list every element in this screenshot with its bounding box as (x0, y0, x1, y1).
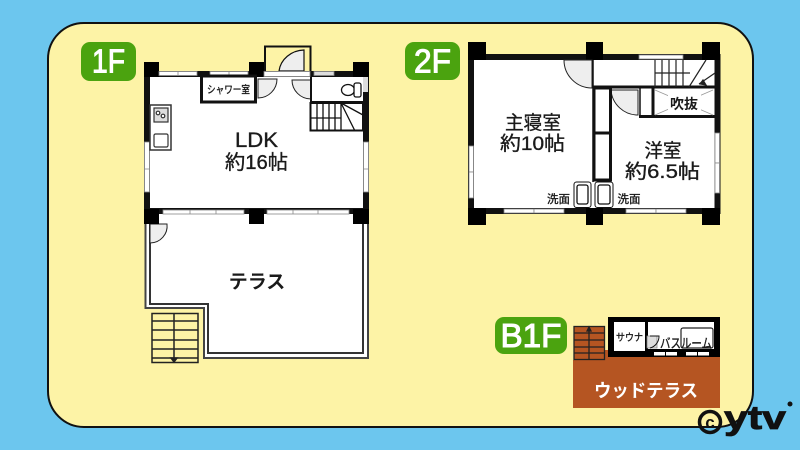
floor plan: 1F (144, 46, 369, 362)
brick stairs (574, 326, 604, 360)
western room label: 洋室 (644, 140, 682, 162)
washbasins (574, 182, 613, 208)
entrance (265, 46, 310, 72)
logo: ytv: c (705, 413, 715, 432)
shower room (202, 76, 256, 102)
bathroom: バスルーム (660, 336, 712, 351)
badge: 1F: 1F (92, 42, 125, 80)
floor plan: 2F (468, 42, 720, 225)
stairs 2F (655, 60, 715, 87)
void 吹抜 (655, 90, 713, 115)
main bedroom label (500, 112, 565, 155)
wood terrace (573, 350, 720, 408)
main bedroom label: 約10帖 (500, 133, 565, 155)
toilet room (311, 77, 368, 102)
pillars and windows (144, 62, 369, 224)
door: main bedroom (564, 60, 592, 88)
badge: 2F (405, 42, 460, 80)
badge: 2F: 2F (414, 42, 451, 80)
sauna: サウナ (616, 332, 643, 344)
label: washbasin left: 洗面 (547, 193, 570, 206)
LDK label: 約16帖 (225, 151, 288, 174)
main bedroom label: 主寝室 (505, 112, 561, 134)
sauna (614, 322, 645, 351)
stairs 1F (310, 103, 363, 131)
void 吹抜: 吹抜 (670, 96, 698, 112)
pillars (468, 42, 720, 225)
rooms outline (471, 57, 718, 211)
door: western room (611, 90, 638, 115)
western room label: 約6.5帖 (625, 161, 700, 183)
inner walls (593, 60, 715, 182)
wood terrace: ウッドテラス (594, 381, 698, 401)
label: washbasin right: 洗面 (618, 193, 640, 206)
exterior stairs (152, 314, 198, 362)
LDK label (225, 129, 288, 174)
terrace door (150, 224, 167, 243)
bathroom windows (654, 352, 709, 356)
floor plan: B1F (573, 317, 720, 408)
windows (469, 55, 720, 213)
kitchen (150, 105, 171, 150)
badge: B1F: B1F (500, 317, 562, 354)
logo: ytv (700, 399, 792, 436)
western room label (625, 140, 700, 183)
bathroom (647, 322, 714, 351)
shower room: シャワー室 (207, 84, 250, 96)
badge: 1F (81, 42, 136, 81)
terrace (146, 210, 368, 358)
door: toilet (292, 80, 311, 99)
LDK label: LDK (235, 129, 278, 152)
logo: ytv: ytv (724, 399, 787, 436)
terrace label: テラス (229, 272, 285, 293)
LDK room (147, 74, 366, 211)
black basement block (608, 317, 720, 357)
panel: yellow floor plan card (48, 23, 753, 427)
door: shower (258, 79, 277, 98)
